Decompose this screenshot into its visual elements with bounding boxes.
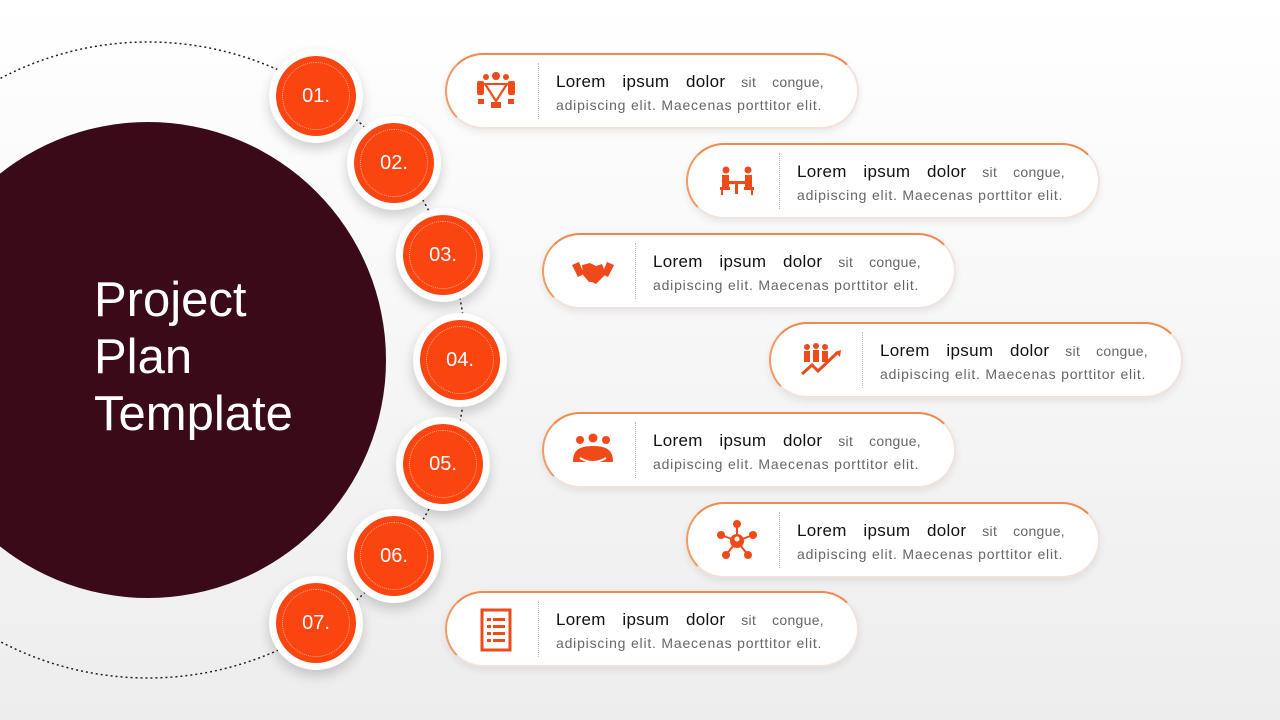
pill 3: Lorem ipsum dolor sit congue, bbox=[653, 252, 921, 271]
pill 2: Lorem ipsum dolor sit congue, bbox=[797, 162, 1065, 181]
number 07 bbox=[269, 576, 363, 670]
pill 1: adipiscing elit. Maecenas porttitor elit. bbox=[556, 97, 822, 113]
title: Project bbox=[94, 273, 247, 327]
icon: checklist bbox=[480, 608, 512, 652]
pill 6: adipiscing elit. Maecenas porttitor elit. bbox=[797, 546, 1063, 562]
pill 4: Lorem ipsum dolor sit congue, bbox=[880, 341, 1148, 360]
number 03 bbox=[396, 208, 490, 302]
number 03: 03. bbox=[429, 244, 457, 266]
icon: team growth bbox=[801, 343, 841, 375]
pill 5: Lorem ipsum dolor sit congue, bbox=[653, 431, 921, 450]
pill 1: Lorem ipsum dolor sit congue, bbox=[556, 72, 824, 91]
pill 6: Lorem ipsum dolor sit congue, bbox=[797, 521, 1065, 540]
title: Template bbox=[94, 387, 293, 441]
pill 7 bbox=[445, 591, 859, 667]
icon: conference table bbox=[477, 72, 515, 108]
title bbox=[94, 273, 293, 441]
number 06: 06. bbox=[380, 545, 408, 567]
number 06 bbox=[347, 509, 441, 603]
icon: network bbox=[717, 520, 757, 559]
pill 7: adipiscing elit. Maecenas porttitor elit. bbox=[556, 635, 822, 651]
number 01 bbox=[269, 49, 363, 143]
number 07: 07. bbox=[302, 612, 330, 634]
pill 6 bbox=[686, 502, 1100, 578]
icon: group bbox=[573, 434, 613, 462]
pill 4 bbox=[769, 322, 1183, 398]
pill 5: adipiscing elit. Maecenas porttitor elit. bbox=[653, 456, 919, 472]
number 04 bbox=[413, 313, 507, 407]
icon: handshake bbox=[572, 262, 614, 284]
icon: meeting bbox=[720, 166, 754, 195]
number 05: 05. bbox=[429, 453, 457, 475]
pill 5 bbox=[542, 412, 956, 488]
pill 3: adipiscing elit. Maecenas porttitor elit. bbox=[653, 277, 919, 293]
pill 2: adipiscing elit. Maecenas porttitor elit. bbox=[797, 187, 1063, 203]
number 01: 01. bbox=[302, 85, 330, 107]
pill 2 bbox=[686, 143, 1100, 219]
pill 1 bbox=[445, 53, 859, 129]
number 05 bbox=[396, 417, 490, 511]
number 02 bbox=[347, 116, 441, 210]
pill 7: Lorem ipsum dolor sit congue, bbox=[556, 610, 824, 629]
number 02: 02. bbox=[380, 152, 408, 174]
number 04: 04. bbox=[446, 349, 474, 371]
pill 4: adipiscing elit. Maecenas porttitor elit. bbox=[880, 366, 1146, 382]
title: Plan bbox=[94, 330, 192, 384]
pill 3 bbox=[542, 233, 956, 309]
main dark circle with title bbox=[0, 122, 386, 598]
